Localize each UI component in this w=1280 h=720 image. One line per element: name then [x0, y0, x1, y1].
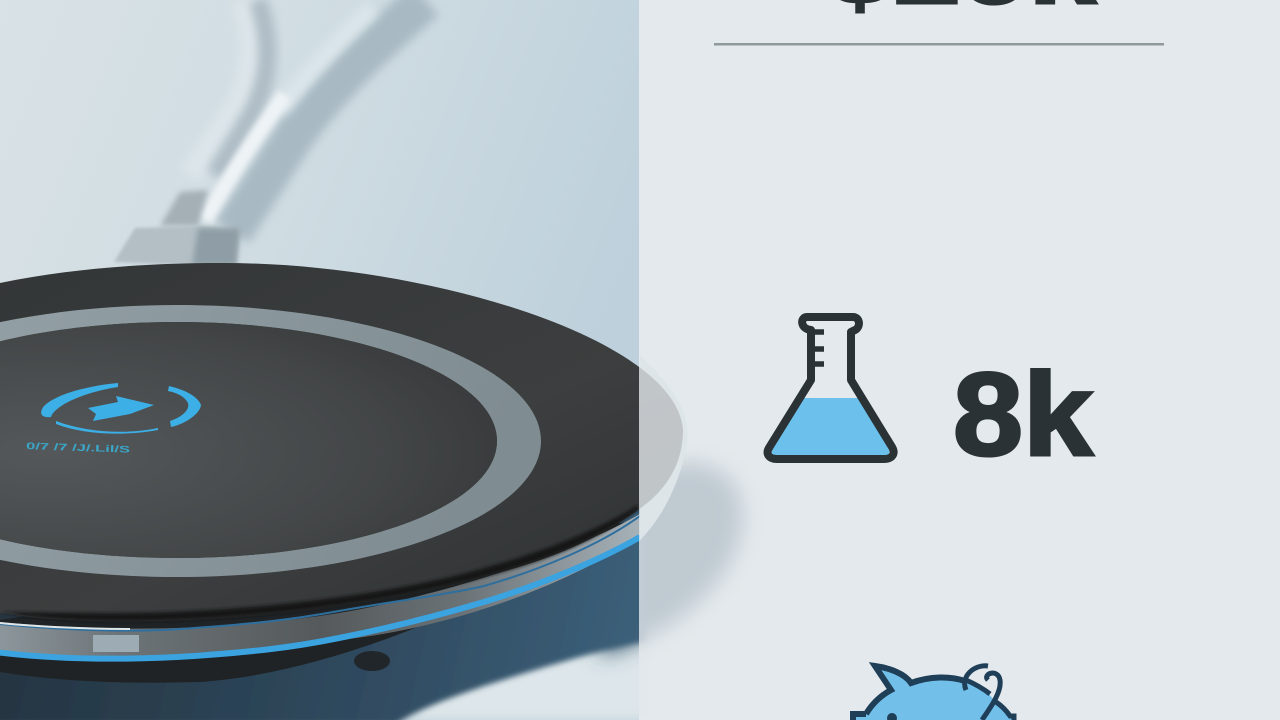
scene background — [0, 0, 640, 720]
charger logo — [26, 383, 201, 456]
icon: piggy bank — [852, 666, 1014, 720]
icon: flask — [768, 317, 894, 459]
light notch — [93, 635, 139, 652]
glass rim of disc — [640, 355, 688, 540]
stat value: 8k: 8k — [953, 349, 1093, 481]
light floor at lower right of scene — [300, 600, 650, 720]
inner disc surface — [0, 322, 497, 558]
blue glow ring — [0, 537, 640, 659]
pig eye — [887, 713, 897, 720]
right side base colour — [639, 0, 1280, 720]
cast shadow beyond panel — [600, 463, 742, 655]
silver band — [0, 514, 640, 657]
logo caption: 0/7 /7 /J/.Lil/S — [26, 441, 130, 456]
charger top disc — [0, 263, 683, 621]
thin blue seam — [0, 516, 640, 631]
divider — [714, 43, 1164, 46]
charger base — [0, 514, 640, 683]
white rim highlight — [0, 623, 130, 629]
cast shadow under charger — [0, 500, 645, 720]
dark lower edge of disc — [0, 505, 638, 621]
metallic ring — [0, 305, 541, 577]
charging cable — [114, 0, 425, 268]
right translucent panel — [639, 0, 1280, 720]
foot — [354, 651, 390, 671]
